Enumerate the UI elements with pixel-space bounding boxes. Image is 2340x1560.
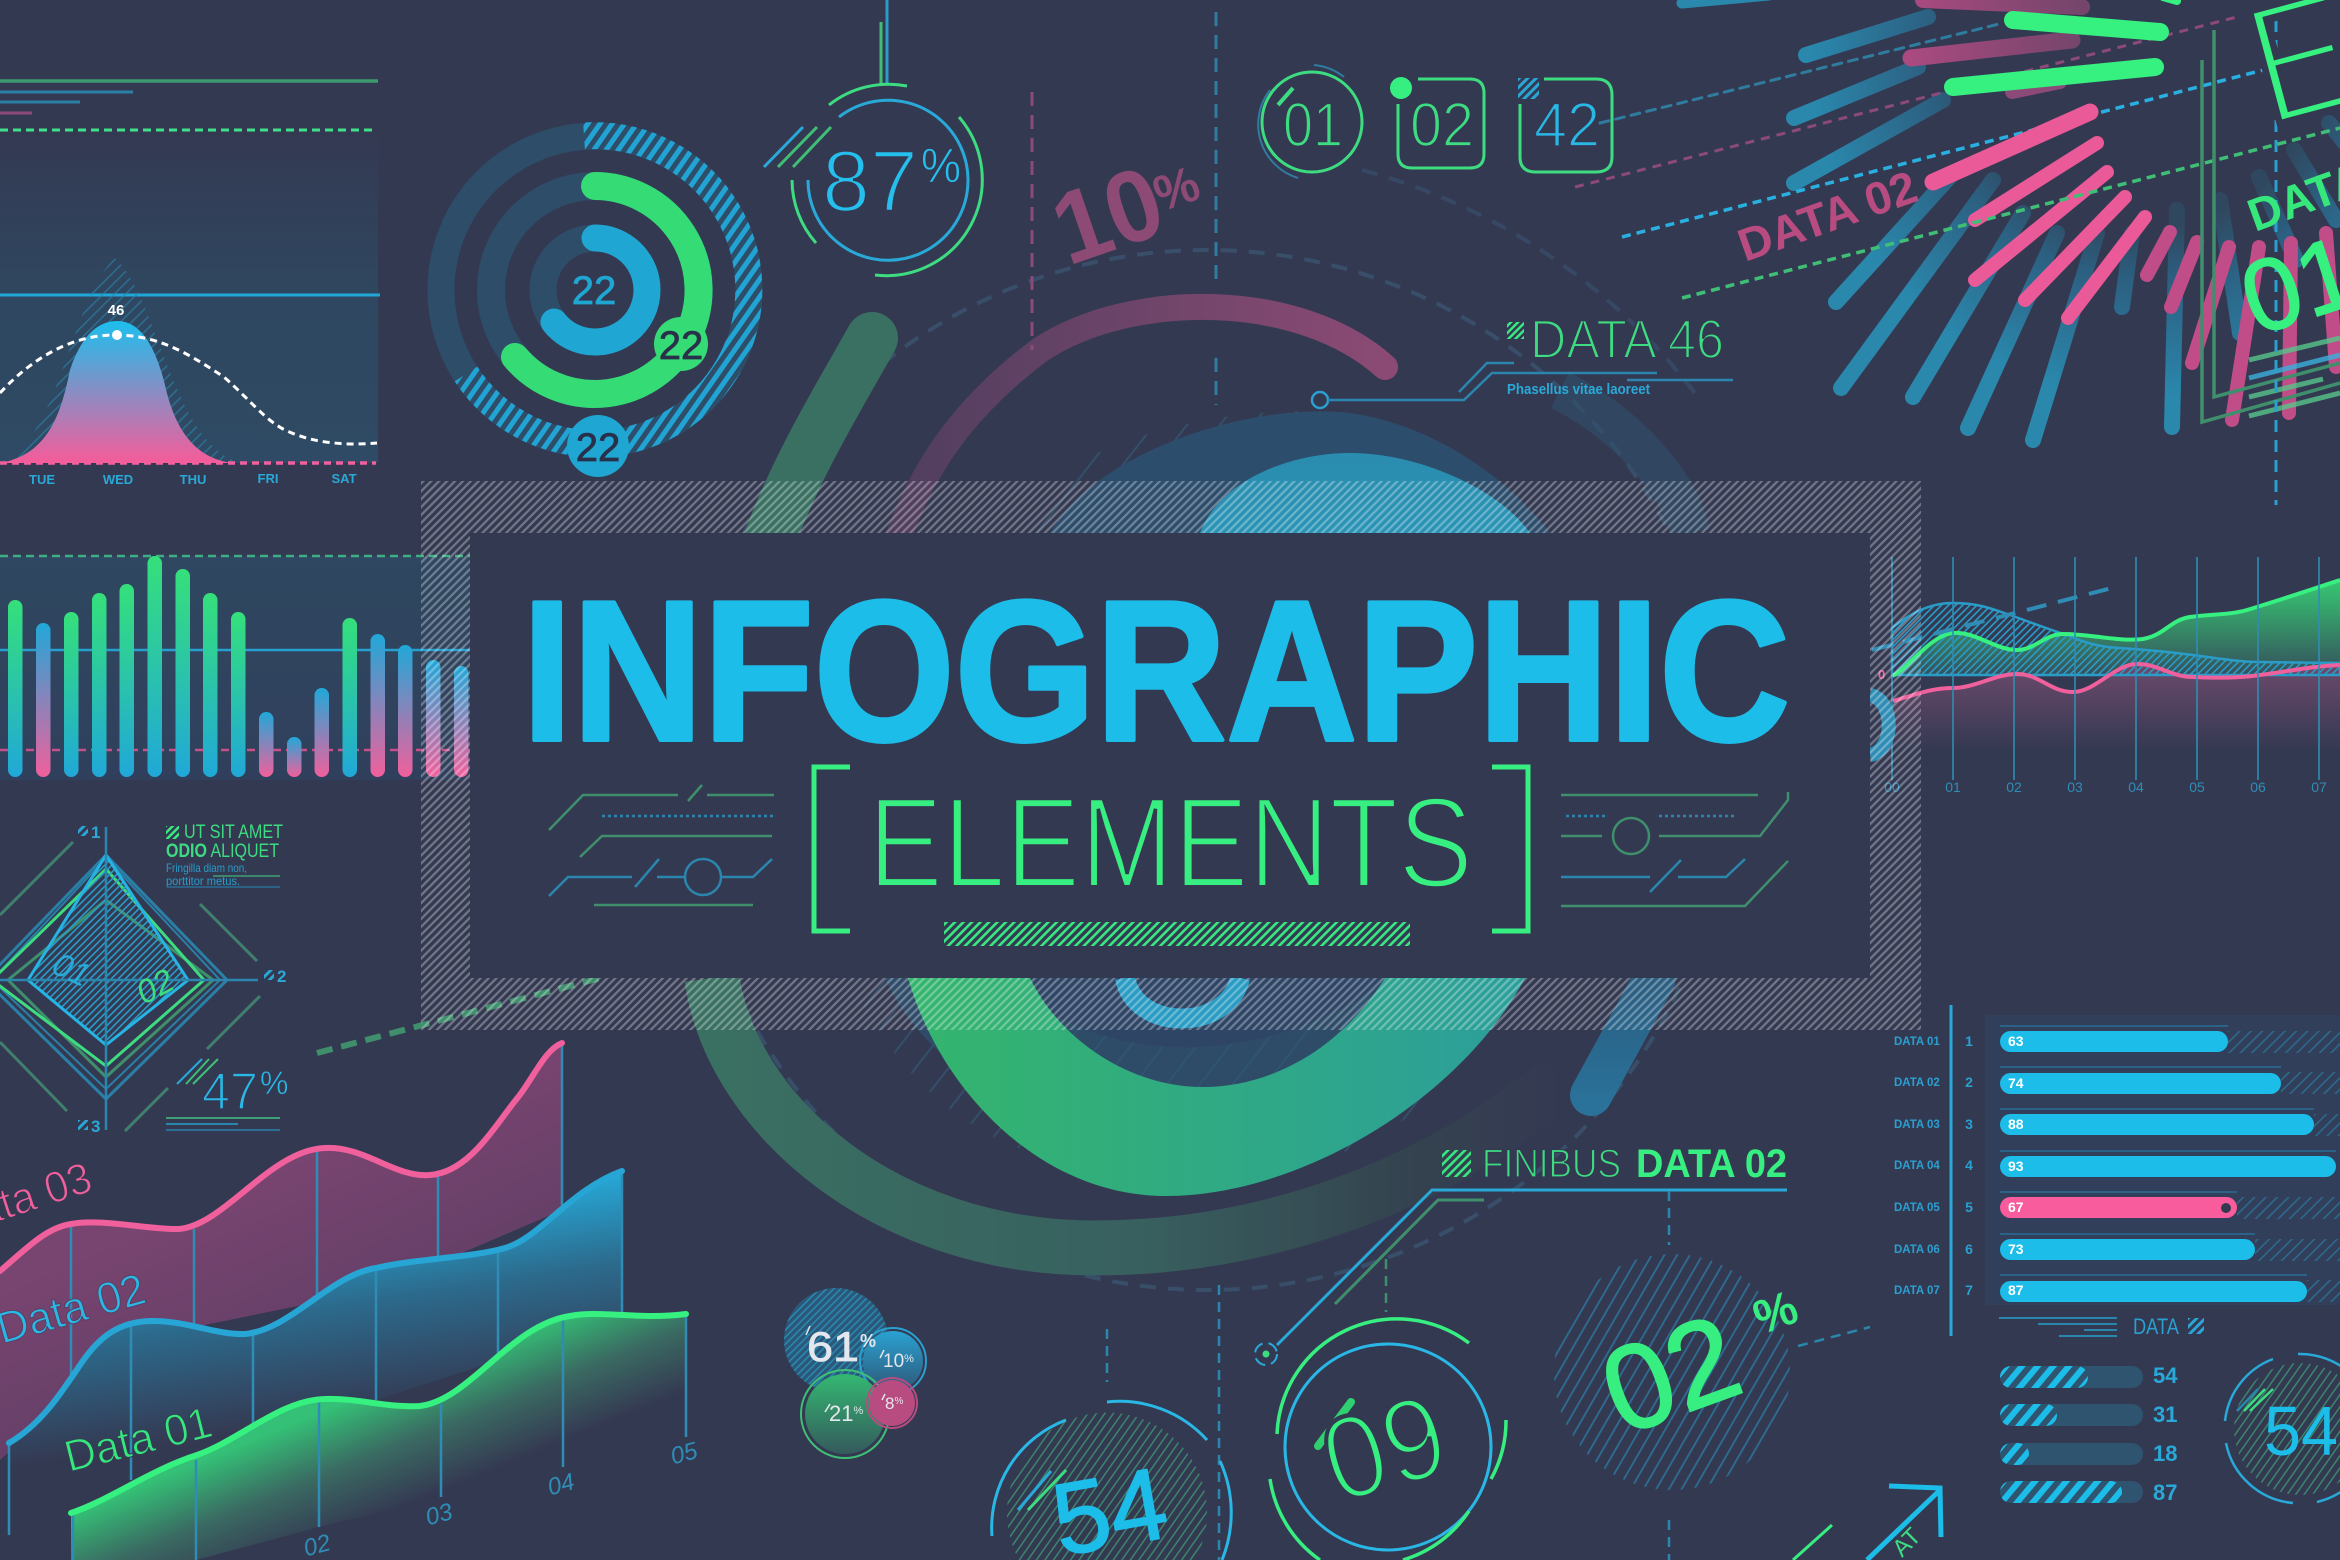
row numbers <box>1965 1033 1973 1298</box>
value text: % <box>921 140 961 193</box>
progress values: 18 <box>2153 1441 2177 1466</box>
value text: 87 <box>822 133 918 230</box>
text block: ut sit amet: Fringilla diam non, <box>166 861 247 875</box>
stat: 47 percent: 47 <box>202 1063 258 1121</box>
row labels: DATA 01 <box>1894 1036 1940 1048</box>
axis labels <box>301 1437 701 1560</box>
gauge: 54 right <box>2225 1354 2340 1503</box>
bar values: 93 <box>2008 1158 2024 1174</box>
donut chart <box>441 136 749 477</box>
highlighted bar <box>2000 1197 2237 1218</box>
area chart: data 01 02 03 <box>0 1043 701 1560</box>
text block: ut sit amet: porttitor metus. <box>166 874 240 888</box>
bar values: 74 <box>2008 1075 2024 1091</box>
horizontal bar chart <box>1894 1005 2340 1336</box>
day labels: TUE <box>29 472 55 487</box>
radar chart <box>0 823 286 1136</box>
data legend <box>1999 1314 2204 1339</box>
hatched frame <box>421 481 1921 1030</box>
central background rings <box>687 170 1727 1290</box>
stat: 10 percent: % <box>1146 155 1207 222</box>
bubble labels: 21 <box>829 1401 853 1426</box>
bar values: 67 <box>2008 1199 2024 1215</box>
radar series labels: 02 <box>130 961 180 1011</box>
x axis labels: 05 <box>2189 779 2205 795</box>
right line chart <box>1870 557 2340 795</box>
line: dashed white curve <box>0 335 377 444</box>
row labels <box>1894 1036 1940 1297</box>
badge: 02: 02 <box>1410 91 1474 160</box>
text block: ut sit amet <box>166 822 283 888</box>
blue bubble value <box>567 415 629 477</box>
bubble labels <box>806 1323 914 1426</box>
stat: 02 percent: % <box>1747 1281 1805 1345</box>
bubble labels: 61 <box>807 1323 859 1370</box>
bubble labels: 10 <box>883 1351 904 1372</box>
day labels: WED <box>103 472 133 487</box>
axis labels: 04 <box>545 1468 577 1501</box>
panel: top left bell chart <box>0 81 380 487</box>
bubble labels: % <box>853 1405 863 1417</box>
label: DATA 02: DATA 02 <box>1731 160 1924 271</box>
right circuit decoration <box>1561 792 1788 906</box>
x axis labels: 03 <box>2067 779 2083 795</box>
title panel <box>470 533 1870 978</box>
row labels: DATA 06 <box>1894 1244 1940 1256</box>
value label: 46 <box>108 302 124 319</box>
progress values: 31 <box>2153 1402 2177 1427</box>
bar chart <box>0 556 470 780</box>
progress values <box>2153 1363 2178 1505</box>
badge: 42 <box>1518 78 1612 172</box>
left circuit decoration <box>549 785 774 905</box>
series labels <box>0 1153 217 1482</box>
badge: 01 <box>1258 65 1362 178</box>
stat: 02 percent: 02 <box>1585 1289 1756 1460</box>
badge: 42: 42 <box>1534 91 1600 160</box>
row numbers: 1 <box>1965 1033 1973 1049</box>
axis labels: 05 <box>668 1437 701 1470</box>
bar values: 63 <box>2008 1033 2024 1049</box>
title: INFOGRAPHIC: INFOGRAPHIC <box>522 560 1790 783</box>
day labels <box>29 471 357 487</box>
stat: 47 percent: % <box>260 1065 288 1101</box>
axis labels: 03 <box>423 1498 456 1531</box>
heading: finibus data 02: DATA 02 <box>1636 1142 1787 1186</box>
series labels: Data 01 <box>60 1398 217 1482</box>
x axis labels: 07 <box>2311 779 2327 795</box>
dashed green diagonal <box>317 978 600 1053</box>
gauge: 09 <box>1270 1319 1506 1560</box>
row numbers: 3 <box>1965 1116 1973 1132</box>
area: bell curve <box>0 321 232 463</box>
bubble labels: % <box>894 1396 903 1407</box>
dashed dividers <box>1032 12 1216 405</box>
radar axis labels: 2 <box>277 967 286 986</box>
donut centre value: 22 <box>572 269 616 313</box>
bubble labels: 8 <box>885 1394 894 1413</box>
radar axis labels <box>78 823 286 1136</box>
right bracket <box>1492 767 1528 931</box>
heading: finibus data 02 <box>1277 1142 1787 1345</box>
bubble labels: % <box>860 1331 876 1351</box>
x axis labels: 06 <box>2250 779 2266 795</box>
day labels: THU <box>180 472 206 487</box>
bar values: 87 <box>2008 1282 2024 1298</box>
x axis labels: 00 <box>1884 779 1900 795</box>
radar axis labels: 1 <box>91 823 100 842</box>
row numbers: 7 <box>1965 1282 1973 1298</box>
gauge: 87 percent <box>764 0 982 276</box>
hatched underline <box>944 922 1410 946</box>
target marker <box>1255 1343 1277 1365</box>
callout: DATA 46: Phasellus vitae laoreet <box>1507 381 1650 398</box>
callout: DATA 46: DATA 46 <box>1530 308 1724 370</box>
heading: finibus data 02: FINIBUS <box>1482 1142 1621 1186</box>
gauge: 54 lower <box>992 1401 1231 1560</box>
row labels: DATA 04 <box>1894 1160 1940 1172</box>
data legend: DATA <box>2133 1314 2179 1339</box>
badge: 02 <box>1390 77 1484 168</box>
bubble chart <box>784 1288 926 1458</box>
x axis labels <box>1884 779 2327 795</box>
gauge: 09: 09 <box>1308 1368 1461 1529</box>
dashed connectors <box>1107 1191 1870 1560</box>
starburst chart <box>1575 0 2340 505</box>
arrow <box>1793 1486 1941 1560</box>
text block: ut sit amet: ODIO ALIQUET <box>166 841 279 862</box>
radar axis labels: 3 <box>91 1117 100 1136</box>
bubble labels: % <box>904 1353 914 1365</box>
left bracket <box>814 767 850 931</box>
badge: 01: 01 <box>1283 91 1343 160</box>
row numbers: 2 <box>1965 1074 1973 1090</box>
value text <box>822 133 961 230</box>
x axis labels: 04 <box>2128 779 2144 795</box>
hatched progress bars <box>2000 1363 2178 1505</box>
stat: 47 percent <box>166 1059 288 1130</box>
radar series labels: 01 <box>47 945 96 994</box>
row labels: DATA 02 <box>1894 1077 1940 1089</box>
bar values: 88 <box>2008 1116 2024 1132</box>
right line chart: 0 <box>1878 667 1885 682</box>
row labels: DATA 07 <box>1894 1285 1940 1297</box>
green bubble value <box>654 317 708 371</box>
row numbers: 4 <box>1965 1157 1973 1173</box>
subtitle: ELEMENTS: ELEMENTS <box>868 771 1473 915</box>
day labels: FRI <box>258 471 278 486</box>
text block: ut sit amet: UT SIT AMET <box>184 822 283 843</box>
green bubble value: 22 <box>659 324 703 368</box>
row numbers: 6 <box>1965 1241 1973 1257</box>
radar series labels <box>47 945 180 1011</box>
gauge: 54 right: 54 <box>2264 1392 2338 1470</box>
bar values: 73 <box>2008 1241 2024 1257</box>
callout: DATA 46 <box>1312 308 1733 408</box>
stat: 10 percent: 10 <box>1038 144 1177 287</box>
x axis labels: 01 <box>1945 779 1961 795</box>
row labels: DATA 03 <box>1894 1119 1940 1131</box>
blue bubble value: 22 <box>576 426 620 470</box>
bar values <box>2008 1033 2024 1298</box>
stat: 02 percent <box>1554 1254 1805 1490</box>
progress values: 87 <box>2153 1480 2177 1505</box>
day labels: SAT <box>331 471 357 486</box>
row labels: DATA 05 <box>1894 1202 1940 1214</box>
x axis labels: 02 <box>2006 779 2022 795</box>
row numbers: 5 <box>1965 1199 1973 1215</box>
progress values: 54 <box>2153 1363 2178 1388</box>
